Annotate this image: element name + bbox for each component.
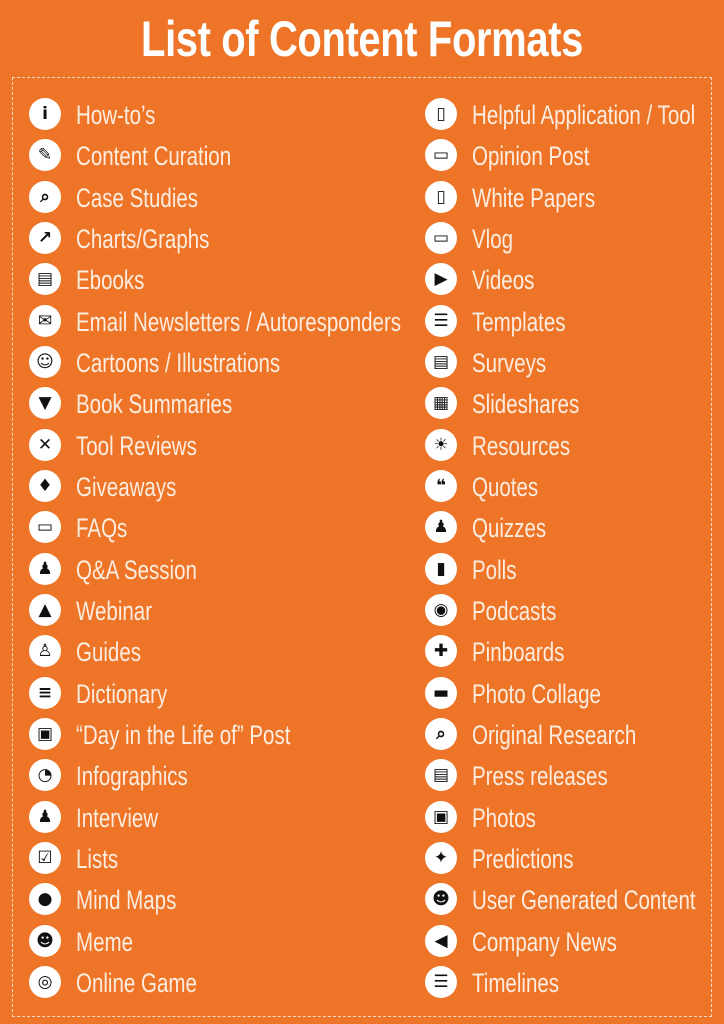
- item: Cartoons: ☺: [36, 352, 54, 372]
- item: Lists: [29, 842, 118, 874]
- item: Tool Reviews: [29, 429, 197, 461]
- item: Mind Maps: [29, 883, 176, 915]
- item: Resources: Resources: [472, 431, 570, 461]
- item: Webinar: ▲: [38, 600, 52, 620]
- item: Pinboards: Pinboards: [472, 637, 564, 667]
- item: Giveaways: ♦: [37, 476, 53, 496]
- item: Vlog: Vlog: [472, 224, 513, 254]
- item: Videos: ▶: [434, 269, 448, 289]
- item: Webinar: [29, 594, 152, 626]
- item: Podcasts: ◉: [434, 600, 448, 620]
- item: White Papers: [425, 181, 595, 213]
- item: FAQs: ▭: [37, 517, 53, 537]
- item: Press releases: ▤: [433, 765, 449, 785]
- item: Predictions: ✦: [434, 848, 448, 868]
- item: Slideshares: ▦: [433, 393, 449, 413]
- item: Templates: [425, 305, 566, 337]
- item: Tool Reviews: Tool Reviews: [76, 431, 197, 461]
- item: Podcasts: Podcasts: [472, 596, 556, 626]
- item: Photo Collage: [425, 677, 601, 709]
- item: Guides: [29, 635, 141, 667]
- item: Opinion Post: ▭: [433, 145, 449, 165]
- item: Photos: [425, 801, 724, 835]
- item: Pinboards: [425, 635, 564, 667]
- item: Timelines: [425, 966, 724, 1000]
- item: Photo Collage: Photo Collage: [472, 679, 601, 709]
- item: Surveys: Surveys: [472, 348, 546, 378]
- item: Guides: Guides: [76, 637, 141, 667]
- item: Vlog: [425, 222, 513, 254]
- item: Photos: ▣: [433, 807, 449, 827]
- item: How-to's: How-to’s: [76, 100, 155, 130]
- item: Charts/Graphs: Charts/Graphs: [76, 224, 209, 254]
- item: Infographics: [29, 759, 188, 791]
- item: Content Curation: ✎: [38, 145, 52, 165]
- item: Infographics: ◔: [38, 765, 52, 785]
- item: Company News: Company News: [472, 927, 617, 957]
- item: Dictionary: ≡: [38, 683, 52, 703]
- item: Templates: Templates: [472, 307, 566, 337]
- item: Webinar: Webinar: [76, 596, 152, 626]
- item: Infographics: Infographics: [76, 761, 188, 791]
- item: Ebooks: [29, 263, 144, 295]
- title: List of Content Formats: [141, 11, 583, 67]
- item: Giveaways: [29, 470, 176, 502]
- item: Opinion Post: [425, 139, 590, 171]
- item: Polls: Polls: [472, 555, 516, 585]
- item: Quizzes: Quizzes: [472, 513, 546, 543]
- item: Predictions: [425, 842, 724, 876]
- item: User Generated Content: [425, 883, 724, 917]
- item: Surveys: ▤: [433, 352, 449, 372]
- item: Helpful Application: Helpful Application / Tool: [472, 100, 695, 130]
- item: Case Studies: Case Studies: [76, 183, 198, 213]
- item: Q&A Session: [29, 553, 197, 585]
- item: Polls: ▮: [436, 559, 446, 579]
- item: Tool Reviews: ✕: [38, 435, 52, 455]
- item: Book Summaries: ▼: [38, 393, 52, 413]
- item: Online Game: [29, 966, 197, 998]
- item: Case Studies: [29, 181, 198, 213]
- item: FAQs: [29, 511, 127, 543]
- item: Meme: [29, 925, 133, 957]
- item: Online Game: ◎: [38, 972, 52, 992]
- item: Meme: ☻: [36, 931, 54, 951]
- item: Book Summaries: Book Summaries: [76, 389, 232, 419]
- item: Timelines: Timelines: [472, 968, 559, 998]
- item: Charts/Graphs: [29, 222, 209, 254]
- item: Podcasts: [425, 594, 556, 626]
- item: Quotes: [425, 470, 538, 502]
- item: Quotes: ❝: [436, 476, 446, 496]
- item: Online Game: Online Game: [76, 968, 197, 998]
- item: Interview: Interview: [76, 803, 158, 833]
- item: Charts/Graphs: ↗: [38, 228, 52, 248]
- item: Case Studies: ⌕: [40, 187, 50, 207]
- item: Original Research: ⌕: [436, 724, 446, 744]
- item: Q&A Session: ♟: [37, 559, 53, 579]
- item: Resources: [425, 429, 570, 461]
- item: Interview: [29, 801, 158, 833]
- item: Videos: [425, 263, 534, 295]
- item: Videos: Videos: [472, 265, 534, 295]
- item: Slideshares: [425, 387, 579, 419]
- item: Resources: ☀: [433, 435, 449, 455]
- item: Mind Maps: Mind Maps: [76, 885, 176, 915]
- column: right: [425, 98, 696, 998]
- item: Dictionary: [29, 677, 168, 709]
- item: Opinion Post: Opinion Post: [472, 141, 589, 171]
- item: Pinboards: ✚: [434, 641, 448, 661]
- item: How-to's: [29, 98, 155, 130]
- item: Company News: [425, 925, 724, 959]
- item: Helpful Application: ▯: [436, 104, 446, 124]
- item: Original Research: Original Research: [472, 720, 636, 750]
- item: Ebooks: Ebooks: [76, 265, 144, 295]
- item: Ebooks: ▤: [37, 269, 53, 289]
- item: Press releases: [425, 759, 724, 793]
- item: White Papers: ▯: [436, 187, 446, 207]
- item: Templates: ☰: [433, 311, 449, 331]
- item: Quotes: Quotes: [472, 472, 538, 502]
- item: Mind Maps: ●: [38, 889, 52, 909]
- item: White Papers: White Papers: [472, 183, 595, 213]
- item: Quizzes: [425, 511, 546, 543]
- item: Slideshares: Slideshares: [472, 389, 579, 419]
- item: Timelines: ☰: [433, 972, 449, 992]
- item: Email Newsletters: ✉: [38, 311, 52, 331]
- item: Predictions: Predictions: [472, 844, 574, 874]
- item: Q&A Session: Q&A Session: [76, 555, 197, 585]
- item: Lists: Lists: [76, 844, 118, 874]
- item: Email Newsletters: Email Newsletters / Autoresponders: [76, 307, 401, 337]
- item: Polls: [425, 553, 516, 585]
- item: Guides: ♙: [37, 641, 53, 661]
- item: Content Curation: Content Curation: [76, 141, 231, 171]
- item: Meme: Meme: [76, 927, 133, 957]
- item: Company News: ◀: [434, 931, 448, 951]
- item: Surveys: [425, 346, 546, 378]
- item: Dictionary: Dictionary: [76, 679, 167, 709]
- item: Lists: ☑: [37, 848, 53, 868]
- item: Cartoons: Cartoons / Illustrations: [76, 348, 280, 378]
- item: Vlog: ▭: [433, 228, 449, 248]
- item: FAQs: FAQs: [76, 513, 127, 543]
- item: Photo Collage: ▬: [433, 683, 449, 703]
- item: Day in the Life: “Day in the Life of” Post: [76, 720, 290, 750]
- item: Photos: Photos: [472, 803, 536, 833]
- item: User Generated Content: ☻: [432, 889, 450, 909]
- item: Quizzes: ♟: [433, 517, 449, 537]
- item: Giveaways: Giveaways: [76, 472, 176, 502]
- item: Day in the Life: ▣: [37, 724, 53, 744]
- item: User Generated Content: User Generated Content: [472, 885, 696, 915]
- item: Interview: ♟: [37, 807, 53, 827]
- item: How-to's: i: [42, 104, 48, 124]
- column: left: [29, 98, 401, 998]
- item: Press releases: Press releases: [472, 761, 608, 791]
